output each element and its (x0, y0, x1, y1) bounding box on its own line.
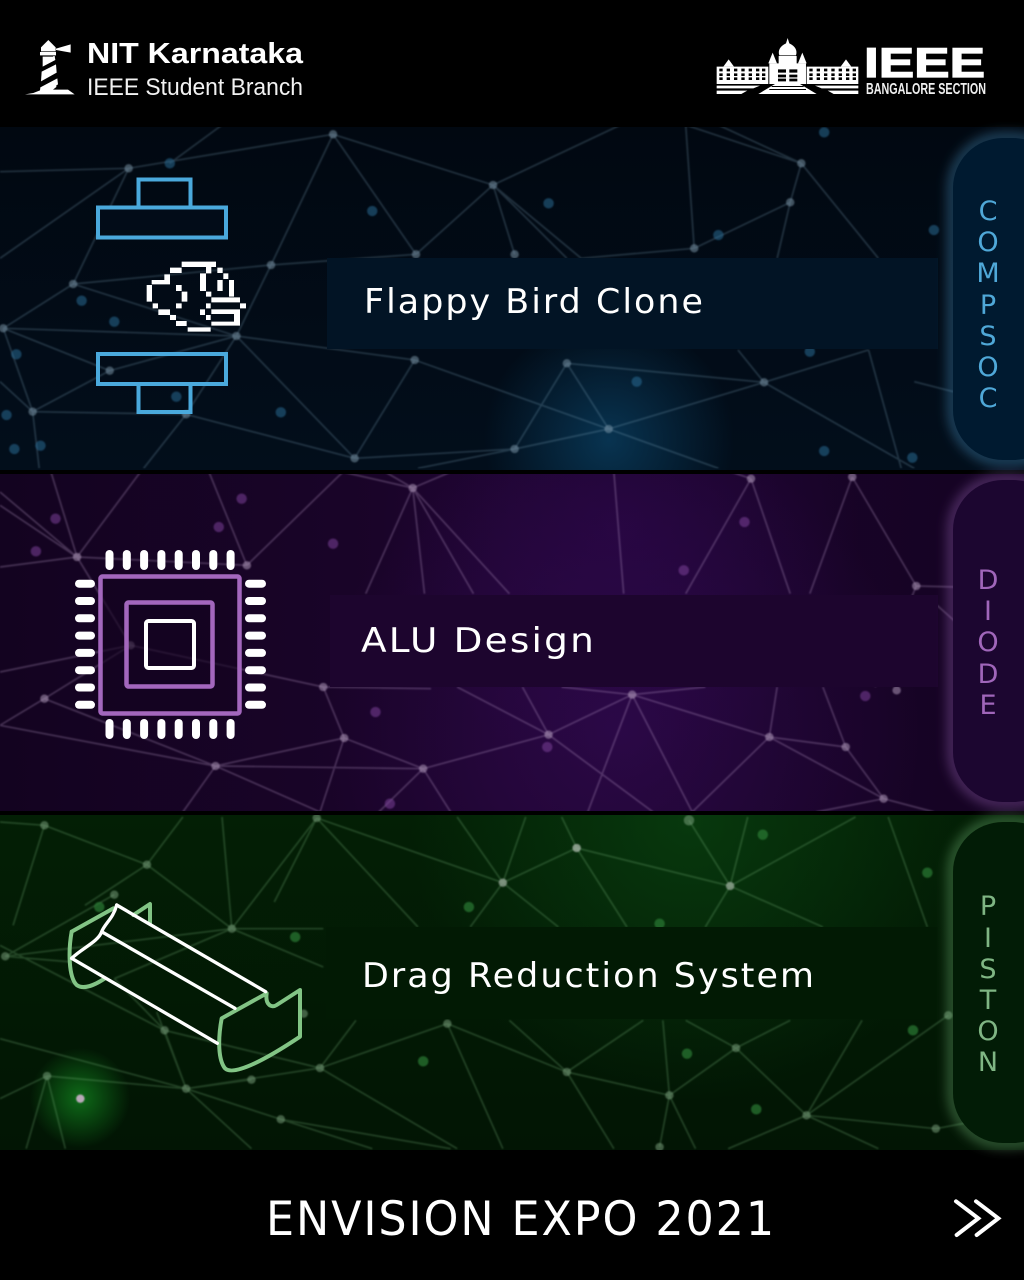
icon: rear wing drag reduction (70, 904, 300, 1070)
arrow: double chevron (956, 1201, 998, 1235)
side tab: PISTON: N (978, 1047, 998, 1078)
side tab: COMPSOC: O (977, 227, 999, 258)
logo: IEEE Bangalore building (717, 38, 858, 94)
side tab: DIODE: O (977, 627, 999, 658)
header (25, 38, 986, 101)
logo: NIT Karnataka lighthouse (25, 40, 75, 94)
title bar: ALU Design: ALU Design (361, 621, 596, 661)
footer (266, 1192, 998, 1247)
logo title: NIT Karnataka (87, 38, 304, 70)
title bar: Flappy Bird Clone: Flappy Bird Clone (364, 282, 705, 322)
logo: IEEE wordmark: IEEE (864, 39, 985, 86)
side tab: DIODE: I (984, 596, 992, 627)
side tab: COMPSOC: M (976, 258, 1000, 289)
icon: chip (75, 550, 266, 739)
logo subtitle: IEEE Student Branch (87, 74, 303, 101)
panel: COMPSOC (0, 125, 1024, 470)
side tab: DIODE: D (978, 659, 998, 690)
icon: flappy bird with pipes (98, 180, 246, 412)
side tab: COMPSOC: P (980, 290, 996, 321)
footer title: ENVISION EXPO 2021 (266, 1192, 776, 1247)
side tab: PISTON: O (977, 1016, 999, 1047)
title bar: ALU Design (330, 595, 938, 687)
side tab: COMPSOC: C (979, 196, 997, 227)
title bar: Drag Reduction System (326, 927, 938, 1019)
panel: PISTON (0, 814, 1024, 1151)
side tab: DIODE: E (979, 690, 997, 721)
side tab: PISTON: S (979, 954, 997, 985)
side tab: PISTON: P (980, 891, 996, 922)
title bar: Flappy Bird Clone (327, 258, 938, 349)
side tab: PISTON: T (979, 985, 997, 1016)
side tab: PISTON: I (984, 923, 992, 954)
side tab: COMPSOC: C (979, 383, 997, 414)
side tab: COMPSOC: S (979, 321, 997, 352)
side tab: DIODE (953, 480, 1024, 802)
panel: DIODE (0, 472, 1024, 812)
side tab: COMPSOC: O (977, 352, 999, 383)
title bar: Drag Reduction System: Drag Reduction System (362, 956, 816, 996)
side tab: DIODE: D (978, 565, 998, 596)
side tab: COMPSOC (953, 138, 1024, 460)
side tab: PISTON (953, 822, 1024, 1143)
